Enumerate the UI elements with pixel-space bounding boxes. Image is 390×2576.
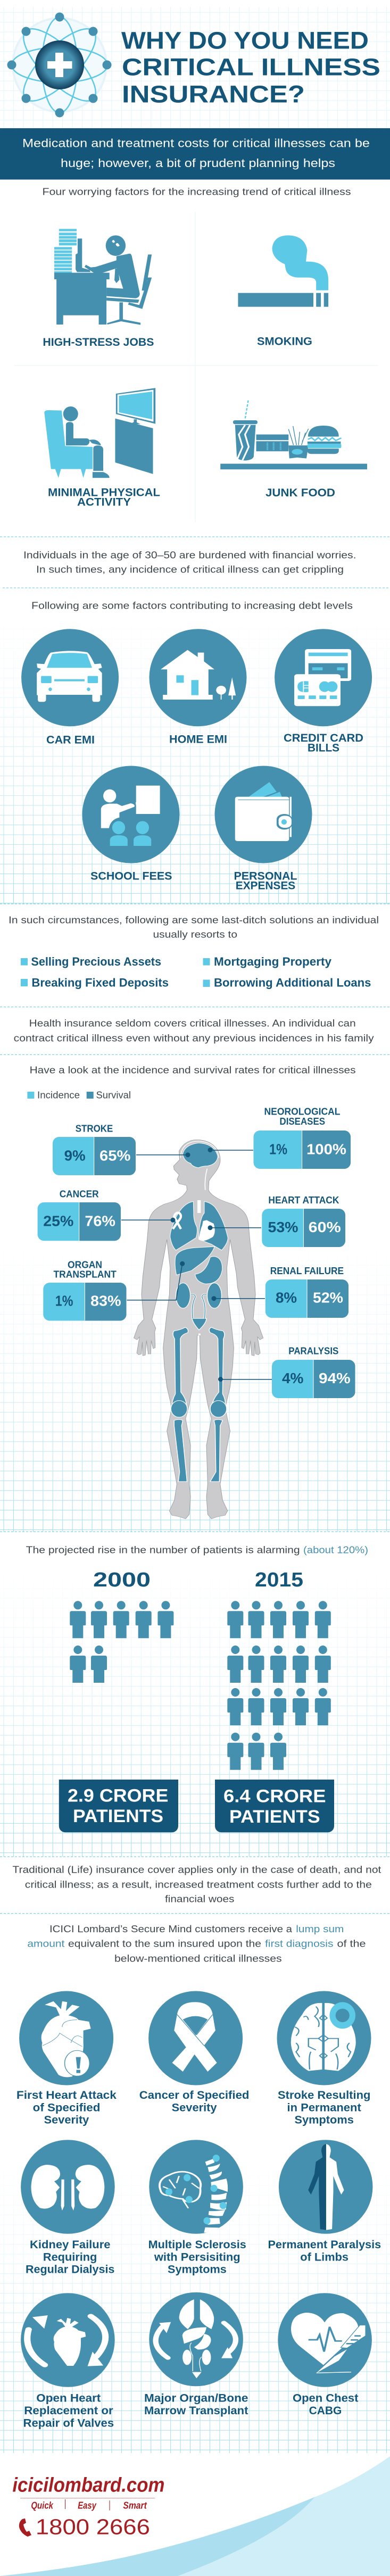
legend <box>27 1090 131 1100</box>
text: last-ditch solutions: In such circumstances, following are some last-ditch solutions an individual <box>9 915 379 925</box>
label: personal expenses: PERSONAL <box>234 870 297 882</box>
icon: school fees <box>82 766 180 863</box>
label: credit card bills: BILLS <box>308 742 339 754</box>
text: financial worries: Individuals in the age of 30–50 are burdened with financial worries. <box>23 550 356 560</box>
background grid: illness list section <box>0 2164 390 2453</box>
stat: cancer: 25% <box>43 1212 73 1229</box>
label: first heart attack <box>16 2089 117 2126</box>
icon: junk food <box>220 401 367 469</box>
stat: cancer: CANCER <box>60 1189 99 1200</box>
label: kidney failure: Regular Dialysis <box>26 2264 114 2276</box>
label: multiple sclerosis: Symptoms <box>168 2264 227 2276</box>
label: cancer: Cancer of Specified <box>139 2089 249 2101</box>
text: traditional life insurance: financial woes <box>165 1894 234 1905</box>
label: cancer: Severity <box>172 2101 217 2114</box>
text: incidence and survival intro: Have a look at the incidence and survival rates for critical illnesses <box>30 1065 356 1076</box>
label: open heart: Replacement or <box>24 2405 113 2417</box>
stat: neurological diseases: NEOROLOGICAL <box>264 1107 341 1117</box>
logo: icicilombard.com <box>12 2474 164 2511</box>
stat: neurological diseases: DISEASES <box>280 1116 325 1127</box>
icon: half-paralysed body <box>279 2140 372 2234</box>
stat: stroke: 9% <box>64 1148 86 1164</box>
label: major organ transplant: Marrow Transplant <box>144 2405 248 2417</box>
label: major organ transplant <box>144 2392 248 2417</box>
stat: renal failure <box>212 1266 348 1318</box>
stat: paralysis: PARALYSIS <box>288 1346 338 1357</box>
label: open heart: Open Heart <box>36 2392 101 2405</box>
icon: brain and spine with lesions <box>149 2140 243 2234</box>
text: Secure Mind benefit: lump sum <box>296 1924 344 1934</box>
callout: 2.9 crore patients <box>59 1780 178 1832</box>
legend: Survival <box>96 1090 131 1100</box>
text: financial worries: In such times, any incidence of critical illness can get crippling <box>36 564 344 575</box>
icon: cancer ribbon <box>148 1991 243 2085</box>
stat: paralysis: 94% <box>319 1370 351 1386</box>
label: personal expenses: EXPENSES <box>236 880 295 892</box>
text: Secure Mind benefit: below-mentioned critical illnesses <box>114 1953 282 1964</box>
text: Secure Mind benefit <box>27 1924 366 1964</box>
banner: Medication and treatment costs for critical illnesses can be <box>22 137 370 150</box>
label: stroke: Symptoms <box>295 2114 354 2126</box>
title: INSURANCE? <box>122 81 305 108</box>
background grid: header <box>0 7 390 128</box>
text: debt factors intro: Following are some factors contributing to increasing debt levels <box>31 600 353 611</box>
label: open chest CABG <box>293 2392 358 2417</box>
banner <box>0 128 390 180</box>
label: stroke <box>278 2089 370 2126</box>
stat: heart attack: 60% <box>309 1219 341 1235</box>
logo: icicilombard.com: icicilombard.com <box>12 2474 164 2497</box>
label: permanent paralysis <box>268 2239 381 2263</box>
stat: paralysis <box>218 1346 355 1398</box>
stat: stroke: STROKE <box>76 1123 113 1134</box>
pictogram: patients in 2015 <box>227 1601 331 1770</box>
footer swoosh <box>0 2456 390 2576</box>
label: multiple sclerosis: with Persisiting <box>154 2251 240 2263</box>
background grid: debt section <box>0 617 390 904</box>
list: last-ditch solutions: Breaking Fixed Deposits <box>31 976 169 989</box>
stat: organ transplant: TRANSPLANT <box>53 1269 117 1280</box>
background grid: body section <box>0 1245 390 1532</box>
icon: open heart replacement <box>21 2293 115 2387</box>
list: last-ditch solutions <box>21 955 371 989</box>
label: minimal physical activity <box>48 487 160 509</box>
human body figure <box>134 1140 263 1519</box>
stat: stroke <box>53 1123 190 1175</box>
label: multiple sclerosis <box>148 2239 246 2276</box>
icon: heart with scalpel <box>278 2293 372 2387</box>
icon: brain with stroke <box>277 1991 371 2085</box>
text: health insurance note: Health insurance seldom covers critical illnesses. An individual can <box>29 1018 356 1028</box>
text: four factors intro: Four worrying factors for the increasing trend of critical illness <box>43 187 351 197</box>
text: projected rise: The projected rise in the number of patients is alarming <box>26 1544 300 1555</box>
legend: Incidence <box>37 1090 80 1100</box>
label: minimal physical activity: ACTIVITY <box>77 496 131 509</box>
list: last-ditch solutions: Selling Precious Assets <box>31 955 161 968</box>
icon: home EMI <box>149 629 247 726</box>
callout: 6.4 crore patients: PATIENTS <box>229 1807 320 1827</box>
pictogram: patients in 2000 <box>70 1601 173 1683</box>
label: stroke: Stroke Resulting <box>278 2089 370 2101</box>
stat: heart attack <box>208 1195 345 1247</box>
callout: 2.9 crore patients: PATIENTS <box>73 1806 163 1826</box>
logo: icicilombard.com: Smart <box>123 2500 147 2511</box>
label: kidney failure: Requiring <box>43 2251 97 2263</box>
text: Secure Mind benefit: amount <box>27 1939 64 1949</box>
label: smoking: SMOKING <box>257 336 312 348</box>
phone number: 1800 2666 <box>36 2515 150 2539</box>
label: open chest CABG: Open Chest <box>293 2392 358 2405</box>
text: Secure Mind benefit: ICICI Lombard’s Secure Mind customers receive a <box>49 1924 293 1934</box>
label: credit card bills <box>284 732 363 754</box>
text: financial worries <box>23 550 356 575</box>
year: 2015: 2015 <box>255 1569 303 1591</box>
text: Secure Mind benefit: equivalent to the sum insured upon the <box>68 1939 261 1949</box>
label: permanent paralysis: Permanent Paralysis <box>268 2239 381 2251</box>
stat: heart attack: 53% <box>268 1219 298 1235</box>
label: open heart: Repair of Valves <box>23 2417 114 2429</box>
label: stroke: in Permanent <box>287 2101 361 2114</box>
icon: car EMI <box>21 629 119 726</box>
list: last-ditch solutions: Borrowing Additional Loans <box>214 976 371 989</box>
icon: person in armchair watching television <box>44 388 155 478</box>
stat: stroke: 65% <box>99 1148 131 1164</box>
icon: heart with warning <box>19 1991 113 2085</box>
label: cancer <box>139 2089 249 2114</box>
text: projected rise <box>26 1544 368 1555</box>
label: credit card bills: CREDIT CARD <box>284 732 363 744</box>
title: CRITICAL ILLNESS <box>122 54 380 81</box>
logo: icicilombard.com: Easy <box>78 2500 97 2511</box>
icon: organ transplant <box>149 2292 243 2386</box>
label: permanent paralysis: of Limbs <box>300 2251 348 2263</box>
stat: neurological diseases: 1% <box>269 1141 287 1157</box>
icon: atom with medical cross <box>7 13 112 117</box>
label: car EMI: CAR EMI <box>46 734 95 746</box>
stat: renal failure: 8% <box>276 1290 297 1306</box>
stat: neurological diseases: 100% <box>306 1141 346 1157</box>
text: last-ditch solutions: usually resorts to <box>153 929 237 940</box>
icon: credit card bills <box>275 629 372 726</box>
callout: 2.9 crore patients: 2.9 CRORE <box>68 1786 168 1806</box>
icon: telephone <box>19 2519 31 2537</box>
icon: high-stress job <box>54 229 152 325</box>
text: projected rise: (about 120%) <box>303 1544 368 1555</box>
background grid: patients section <box>0 1569 390 1857</box>
text: Secure Mind benefit: of the <box>337 1939 366 1949</box>
stat: organ transplant: ORGAN <box>68 1259 102 1270</box>
title <box>121 27 380 108</box>
text: health insurance note: contract critical illness even without any previous incidences in his family <box>14 1033 374 1043</box>
label: personal expenses <box>234 870 297 892</box>
label: minimal physical activity: MINIMAL PHYSICAL <box>48 487 160 499</box>
banner: huge; however, a bit of prudent planning helps <box>61 156 335 170</box>
label: home EMI: HOME EMI <box>169 734 227 746</box>
stat: renal failure: RENAL FAILURE <box>270 1266 344 1276</box>
label: junk food: JUNK FOOD <box>265 487 335 499</box>
label: open heart <box>23 2392 114 2429</box>
text: last-ditch solutions <box>9 915 379 940</box>
icon: kidneys <box>21 2140 115 2234</box>
stat: organ transplant <box>43 1259 185 1320</box>
label: kidney failure <box>26 2239 114 2276</box>
label: major organ transplant: Major Organ/Bone <box>144 2392 248 2405</box>
text: health insurance note <box>14 1018 374 1043</box>
label: multiple sclerosis: Multiple Sclerosis <box>148 2239 246 2251</box>
stat: renal failure: 52% <box>313 1290 343 1306</box>
label: open chest CABG: CABG <box>309 2405 342 2417</box>
year: 2000: 2000 <box>93 1569 151 1591</box>
text: traditional life insurance: Traditional (Life) insurance cover applies only in the case of death, and not <box>12 1865 381 1875</box>
callout: 6.4 crore patients: 6.4 CRORE <box>223 1786 326 1807</box>
stat: paralysis: 4% <box>282 1370 304 1386</box>
text: traditional life insurance <box>12 1865 381 1905</box>
label: first heart attack: First Heart Attack <box>16 2089 117 2101</box>
label: high-stress jobs: HIGH-STRESS JOBS <box>43 336 154 348</box>
callout: 6.4 crore patients <box>215 1780 334 1832</box>
list: last-ditch solutions: Mortgaging Property <box>214 955 332 968</box>
label: first heart attack: Severity <box>44 2114 89 2126</box>
label: school fees: SCHOOL FEES <box>90 870 172 882</box>
label: kidney failure: Kidney Failure <box>30 2239 111 2251</box>
stat: organ transplant: 83% <box>90 1293 121 1309</box>
logo: icicilombard.com: Quick <box>31 2500 54 2511</box>
icon: cigarette with smoke <box>238 235 328 307</box>
text: traditional life insurance: critical illness; as a result, increased treatment costs further add to the <box>25 1879 372 1890</box>
stat: neurological diseases <box>208 1107 351 1169</box>
stat: cancer <box>38 1189 175 1241</box>
stat: cancer: 76% <box>85 1212 115 1229</box>
icon: wallet <box>215 766 312 863</box>
stat: organ transplant: 1% <box>55 1293 73 1309</box>
stat: heart attack: HEART ATTACK <box>268 1195 339 1206</box>
label: first heart attack: of Specified <box>33 2101 100 2114</box>
text: Secure Mind benefit: first diagnosis <box>265 1939 333 1949</box>
title: WHY DO YOU NEED <box>121 27 369 54</box>
